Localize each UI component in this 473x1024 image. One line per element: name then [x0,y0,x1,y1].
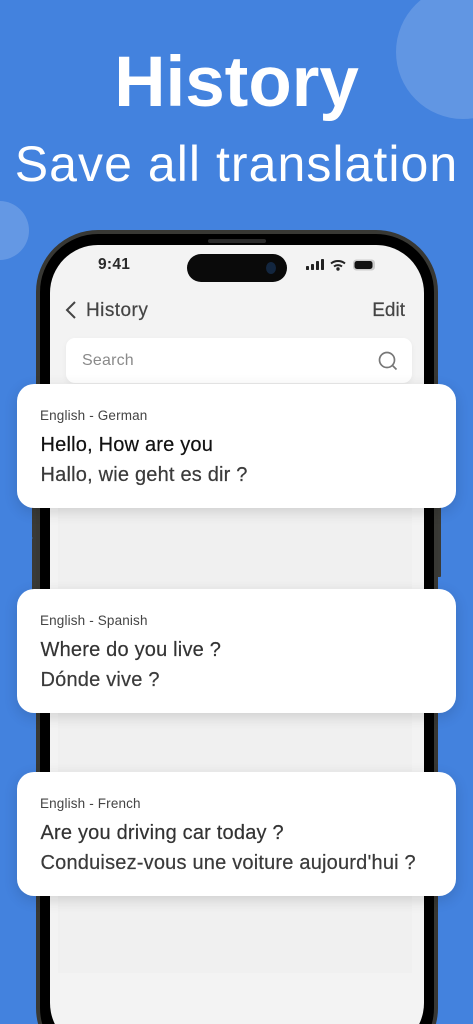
translated phrase: Hallo, wie geht es dir ? [40,464,248,486]
status bar time: 9:41 [98,256,130,273]
card: English - German [17,384,456,508]
language pair: English - French [40,796,141,811]
translated phrase: Conduisez-vous une voiture aujourd'hui ? [40,852,416,874]
status icons [306,259,375,271]
side button: right [436,490,441,577]
search placeholder: Search [82,352,134,369]
search bar [66,338,412,383]
side button: left lower [32,538,37,590]
back chevron [66,301,76,319]
phone frame [36,230,438,1024]
translated phrase: Dónde vive ? [40,669,160,691]
subtitle: Save all translation [15,136,458,192]
dynamic island [187,254,287,282]
decorative circle: left [0,201,29,260]
source phrase: Where do you live ? [40,639,221,661]
source phrase: Are you driving car today ? [40,822,284,844]
card: English - Spanish [17,589,456,713]
source phrase: Hello, How are you [40,434,213,456]
title: History [114,43,359,122]
nav title: History [86,300,148,321]
phone mockup [36,230,438,1024]
camera lens [266,262,276,274]
search icon [378,352,397,370]
speaker [208,239,266,243]
card: English - French [17,772,456,896]
content background panel [58,505,412,973]
edit action: Edit [372,300,405,321]
phone screen [50,245,424,1024]
language pair: English - Spanish [40,613,148,628]
language pair: English - German [40,408,147,423]
side button: left upper [32,490,37,538]
decorative circle: top right [396,0,473,119]
